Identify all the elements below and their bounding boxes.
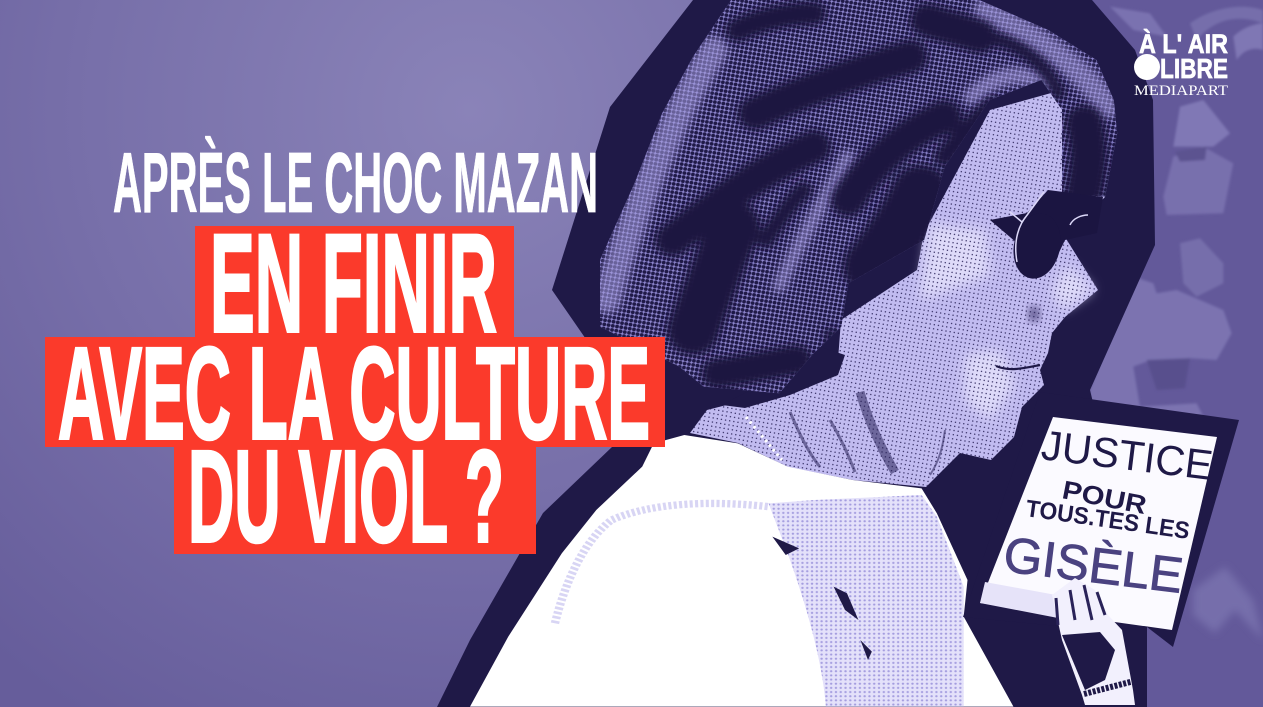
red highlight line 3 [174,446,536,554]
hair [600,0,1117,393]
headline: DU VIOL ? [188,422,504,570]
hand holding the sign [1052,578,1135,705]
sign text: POUR [1060,474,1149,520]
sign text: JUSTICE [1039,421,1215,489]
portrait: Gisèle Pelicot cut-out [437,0,1155,707]
white shirt [470,435,1013,707]
shirt shoulder seam [555,503,769,623]
headline [58,204,650,570]
headline: EN FINIR [210,204,497,362]
bracelet [1084,681,1134,694]
neck creases [790,392,945,475]
sign text: GISÈLE [1001,526,1186,604]
logo: A l'air libre Mediapart: MEDIAPART [1134,83,1228,99]
logo: A l'air libre Mediapart: LIBRE [1160,53,1228,84]
logo: A l'air libre Mediapart [1134,28,1228,99]
red highlight line 1 [195,226,514,338]
red highlight line 2 [45,337,665,447]
face and neck [690,90,1105,487]
protest sign [963,392,1239,705]
sunglasses [990,190,1103,283]
logo: A l'air libre Mediapart: À L' AIR [1139,28,1228,59]
mouth [996,365,1040,369]
background crowd faces [1090,0,1263,707]
sign text [1001,421,1215,604]
bright cheek and nose highlights [920,225,1093,420]
textured shirt fold [769,495,964,707]
title block: AVEC LA CULTURE [58,320,650,466]
lighter hair sweeps [607,10,1107,300]
title block: APRÈS LE CHOC MAZAN [113,136,598,231]
title block [45,136,665,570]
dark cut-out silhouette [437,0,1155,707]
necklace [746,417,782,460]
shirt creases [772,537,872,660]
nostril [1028,306,1040,322]
dark neck shadow under hair [722,345,845,408]
sign text: TOUS.TES LES [1024,495,1191,545]
dark hair streaks [672,13,1088,373]
